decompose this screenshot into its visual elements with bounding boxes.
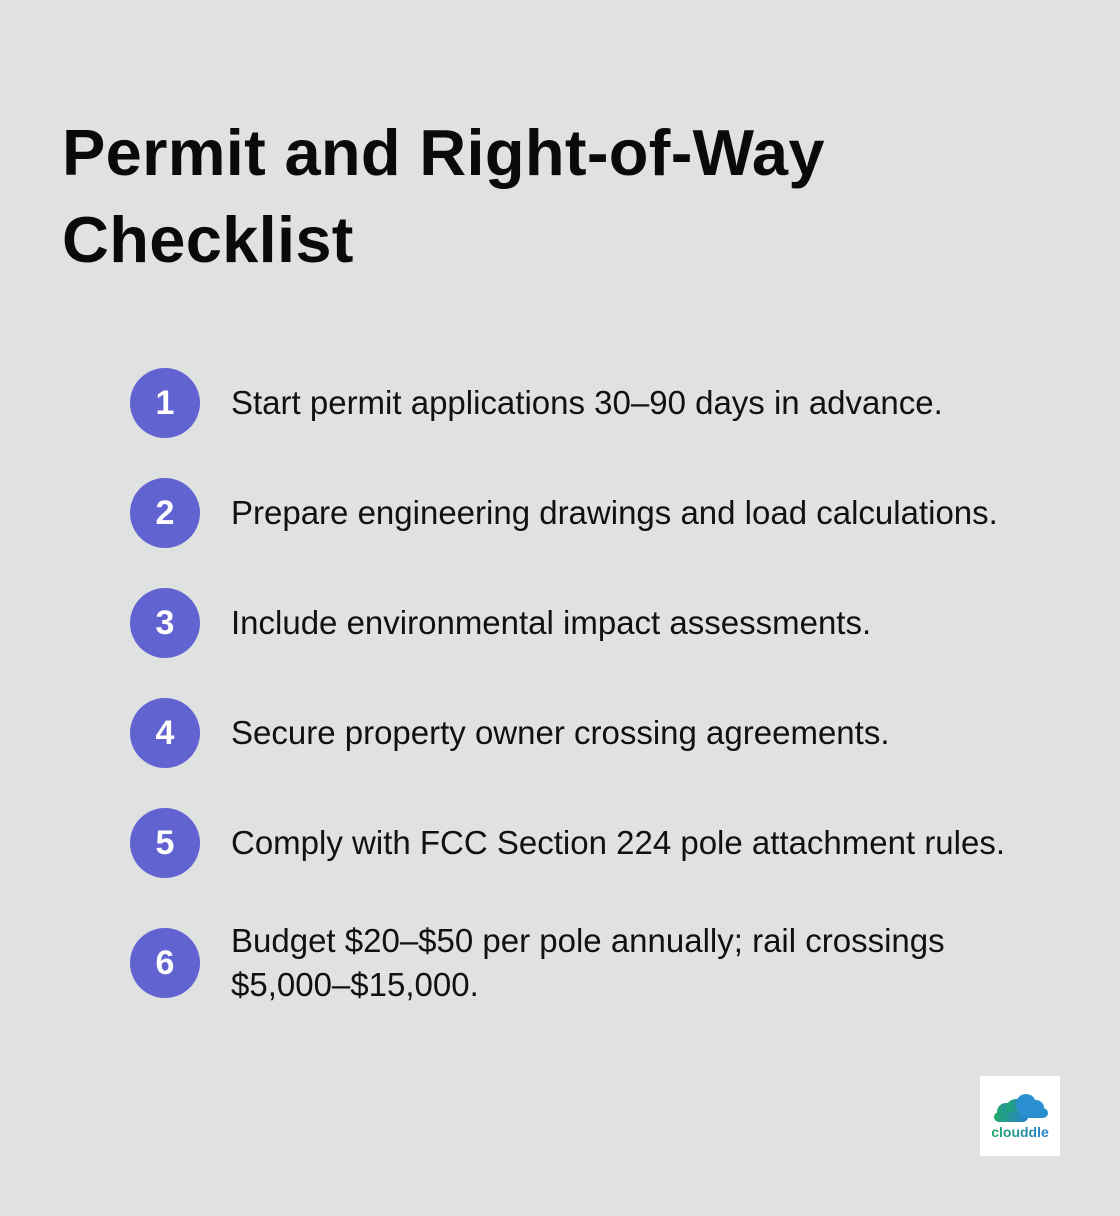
item 6 (130, 922, 945, 1003)
item 1 (130, 368, 943, 438)
item 6: Budget $20–$50 per pole annually; rail crossings (231, 922, 945, 959)
logo (980, 1076, 1060, 1156)
item 2 (130, 478, 998, 548)
item 4: Secure property owner crossing agreements. (231, 714, 890, 751)
item 4: 4 (156, 714, 174, 752)
item 3 (130, 588, 871, 658)
item 4 (130, 698, 890, 768)
item 5: Comply with FCC Section 224 pole attachment rules. (231, 824, 1005, 861)
item 6: 6 (156, 944, 174, 982)
title (62, 116, 825, 276)
item 5: 5 (156, 824, 174, 862)
logo: clouddle (991, 1124, 1049, 1140)
title: Permit and Right-of-Way (62, 116, 825, 189)
item 1: 1 (156, 384, 174, 422)
item 6: $5,000–$15,000. (231, 966, 479, 1003)
item 1: Start permit applications 30–90 days in advance. (231, 384, 943, 421)
item 3: 3 (156, 604, 174, 642)
title: Checklist (62, 203, 354, 276)
item 2: Prepare engineering drawings and load calculations. (231, 494, 998, 531)
item 2: 2 (156, 494, 174, 532)
item 5 (130, 808, 1005, 878)
item 3: Include environmental impact assessments. (231, 604, 871, 641)
